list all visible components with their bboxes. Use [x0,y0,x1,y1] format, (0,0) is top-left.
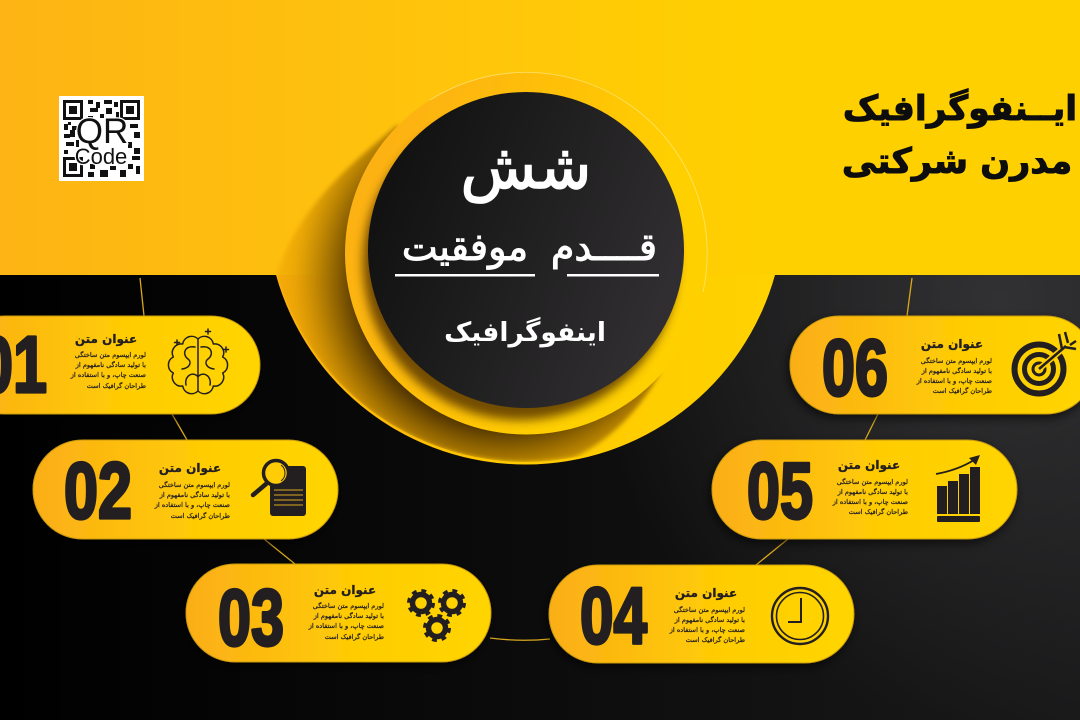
body 05: با تولید سادگی نامفهوم از [837,488,908,496]
icon: brain [168,329,228,394]
title 02: عنوان متن [159,461,221,476]
body 06: لورم ایپسوم متن ساختگی [921,357,992,365]
body 06: با تولید سادگی نامفهوم از [921,367,992,375]
page title: ایــنفوگرافیک [843,88,1077,129]
body 06 [916,357,992,395]
icon: gears [409,591,464,640]
body 03: طراحان گرافیک است [325,633,384,641]
body 02: صنعت چاپ، و با استفاده از [154,501,230,509]
page title [842,88,1077,182]
panel: step 06 [790,316,1080,414]
body 01: با تولید سادگی نامفهوم از [75,361,146,369]
body 05 [832,478,908,516]
icon: target [1014,332,1076,394]
title 04: عنوان متن [675,586,737,601]
body 06: صنعت چاپ، و با استفاده از [916,377,992,385]
body 01 [70,351,146,390]
body 04: طراحان گرافیک است [686,636,745,644]
panel: step 02 [33,440,338,539]
body 02: لورم ایپسوم متن ساختگی [159,481,230,489]
panel: step 04 [549,565,854,663]
central heading: steps to success: موفقیت [402,225,528,270]
body 02 [154,481,230,520]
panel: step 01 [0,316,260,414]
body 06: طراحان گرافیک است [933,387,992,395]
central heading: steps to success: قــــدم [551,225,657,269]
number 02: 02 [64,446,132,535]
body 04 [669,606,745,644]
shadow of black circle [363,106,677,420]
body 03: با تولید سادگی نامفهوم از [313,612,384,620]
QR code: Code [75,144,127,169]
central heading: infographic: اینفوگرافیک [444,316,606,348]
page title: مدرن شرکتی [842,142,1072,182]
title 03: عنوان متن [314,583,376,598]
connector lines [140,278,912,640]
body 05: لورم ایپسوم متن ساختگی [837,478,908,486]
cast shadow [276,125,660,462]
middle circle highlight [430,72,707,292]
body 01: طراحان گرافیک است [87,382,146,390]
body 04: صنعت چاپ، و با استفاده از [669,626,745,634]
body 03 [308,602,384,641]
number 03: 03 [218,573,284,662]
body 02: طراحان گرافیک است [171,512,230,520]
icon: magnifier and document [253,460,306,516]
title 05: عنوان متن [838,458,900,473]
central heading: steps to success [395,225,659,276]
central heading: six: شش [460,130,592,203]
number 04: 04 [580,571,647,660]
body 03: لورم ایپسوم متن ساختگی [313,602,384,610]
body 05: صنعت چاپ، و با استفاده از [832,498,908,506]
body 05: طراحان گرافیک است [849,508,908,516]
black circle [368,92,684,408]
icon: growth chart [936,455,980,522]
QR code: QR [76,112,128,151]
body 03: صنعت چاپ، و با استفاده از [308,622,384,630]
body 04: با تولید سادگی نامفهوم از [674,616,745,624]
body 01: صنعت چاپ، و با استفاده از [70,371,146,379]
background: yellow upper section [0,0,1080,275]
big yellow circle [276,275,775,464]
title 06: عنوان متن [921,337,983,352]
number 06: 06 [822,323,888,412]
background: black lower section [0,275,1080,720]
central disc stack [276,72,775,464]
body 04: لورم ایپسوم متن ساختگی [674,606,745,614]
icon: clock [772,588,828,644]
body 02: با تولید سادگی نامفهوم از [159,491,230,499]
panel: step 03 [186,564,491,662]
middle circle [345,72,707,434]
panel: step 05 [712,440,1017,539]
body 01: لورم ایپسوم متن ساختگی [75,351,146,359]
title 01: عنوان متن [75,332,137,347]
number 05: 05 [747,446,813,535]
QR code [59,96,144,181]
